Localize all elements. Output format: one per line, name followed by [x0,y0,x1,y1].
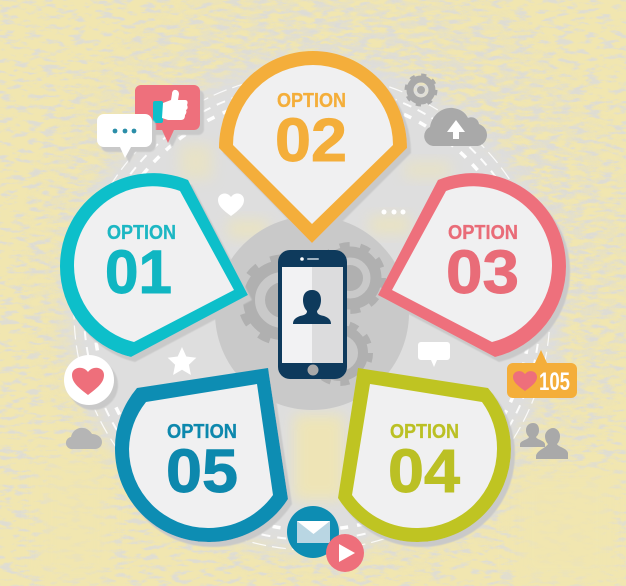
gears behind phone [241,245,383,383]
number: 04: 04 [388,437,460,505]
label: option 02: OPTION [277,90,346,112]
panel: option 05 [115,368,288,542]
number: 03: 03 [446,238,519,306]
panel: option 03 [378,173,566,357]
icon: user silhouette [293,290,331,324]
icon: three white dots [382,210,406,214]
label: option 05: OPTION [167,421,237,443]
icon: play circle [326,534,364,572]
number: 05: 05 [166,437,238,505]
icon: heart in white circle [64,355,114,405]
icon: upload cloud [424,108,487,146]
icon: white star [168,347,196,375]
icon: white chat bubble [97,114,152,158]
number: 01: 01 [105,238,172,306]
central gray disc [215,216,409,410]
text: 105: 105 [539,368,570,396]
panel: option 02 [219,51,407,243]
gear: bottom right [310,323,370,383]
icon: thumbs-up speech bubble [135,85,200,143]
icon: small gray cloud [66,428,102,449]
panel: option 01 [60,173,248,357]
icon: envelope circle [287,506,339,558]
icon: settings gear [406,76,436,104]
label: option 03: OPTION [448,222,518,244]
icon: people [520,423,568,459]
smartphone [278,250,347,379]
label: option 04: OPTION [390,421,459,443]
gear: top right [317,245,383,311]
number: 02: 02 [275,106,347,174]
panel: option 04 [338,368,511,542]
label: option 01: OPTION [107,222,176,244]
icon: small white bubble [418,342,450,367]
gear: left [241,258,325,342]
icon: white heart [218,193,244,216]
dashed orbit rings [74,74,550,550]
badge: heart 105 likes [507,350,577,398]
